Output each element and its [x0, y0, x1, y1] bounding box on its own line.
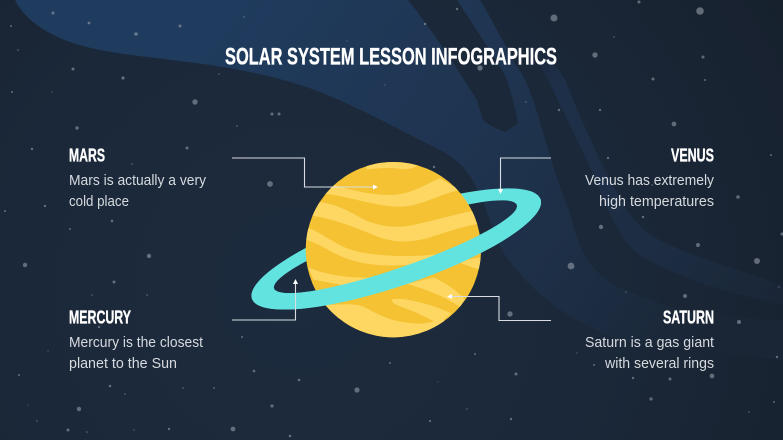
text block: Mercury: planet to the Sun: [69, 356, 177, 372]
text block: Saturn: with several rings: [604, 356, 714, 372]
text block: Mars: Mars is actually a very: [69, 173, 207, 189]
text block: Venus: VENUS: [671, 146, 714, 166]
connector arrow: Mars: [232, 158, 378, 190]
text block: Mars: [69, 146, 207, 210]
planet body: [303, 158, 483, 343]
text block: Saturn: SATURN: [663, 308, 714, 328]
connector arrow: Venus: [498, 158, 551, 194]
connector arrow: Mercury: [232, 279, 298, 320]
planet with ring: [251, 162, 542, 338]
title: SOLAR SYSTEM LESSON INFOGRAPHICS: [225, 44, 557, 70]
text block: Venus: high temperatures: [599, 194, 714, 210]
connector arrow: Saturn: [447, 294, 551, 320]
text block: Saturn: [585, 308, 714, 372]
text block: Mercury: MERCURY: [69, 308, 131, 328]
text block: Mercury: [69, 308, 203, 372]
text block: Mars: cold place: [69, 194, 129, 210]
text block: Venus: [585, 146, 715, 210]
ring: back part: [240, 165, 553, 333]
text block: Venus: Venus has extremely: [585, 173, 715, 189]
ring: front part: [252, 198, 542, 310]
text block: Mars: MARS: [69, 146, 105, 166]
text block: Saturn: Saturn is a gas giant: [585, 335, 714, 351]
text block: Mercury: Mercury is the closest: [69, 335, 203, 351]
